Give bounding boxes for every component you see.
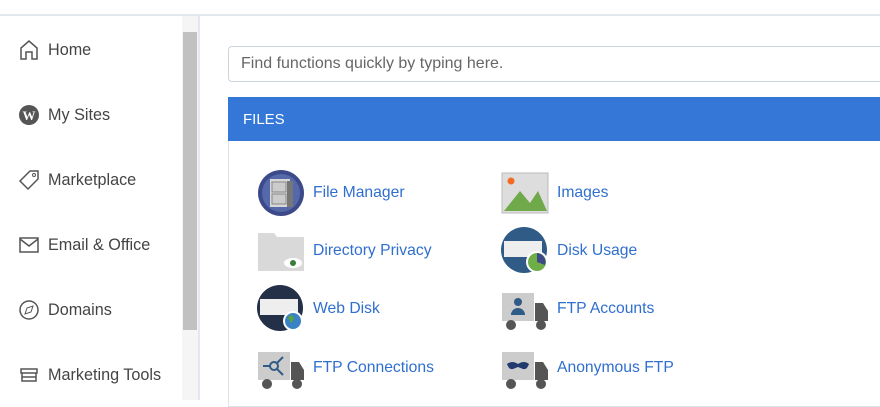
item: File Manager: File Manager [313,184,405,201]
search box: Find functions quickly by typing here. [241,55,503,72]
nav: My Sites [19,105,110,125]
header [228,97,880,141]
header: FILES [243,111,285,128]
nav: Home: Home [48,40,91,58]
nav: My Sites: My Sites [48,106,110,124]
item: File Manager [258,170,405,216]
nav: Home [20,40,91,60]
nav: Email & Office: Email & Office [48,236,150,254]
item: Web Disk [257,285,380,331]
item: FTP Accounts: FTP Accounts [557,300,654,317]
panel: files [228,97,880,407]
item: Images [502,172,608,214]
scrollbar [182,16,198,400]
nav: Marketing Tools: Marketing Tools [48,366,161,384]
item: Anonymous FTP: Anonymous FTP [557,359,674,376]
nav: Marketplace: Marketplace [48,170,136,188]
item: Disk Usage: Disk Usage [557,242,637,259]
sidebar [19,40,161,384]
item: Disk Usage [501,227,637,273]
nav: My Sites: W [22,108,36,123]
item: FTP Accounts [502,293,654,330]
nav: Domains [19,300,112,320]
item: Web Disk: Web Disk [313,300,380,317]
item: Directory Privacy [258,233,432,271]
item: Images: Images [557,184,608,201]
item: Directory Privacy: Directory Privacy [313,242,432,259]
nav: Domains: Domains [48,300,112,318]
search box [228,46,880,82]
nav: Marketplace [19,170,136,190]
item: Anonymous FTP [502,352,674,389]
item: FTP Connections [258,352,434,389]
item: FTP Connections: FTP Connections [313,359,434,376]
